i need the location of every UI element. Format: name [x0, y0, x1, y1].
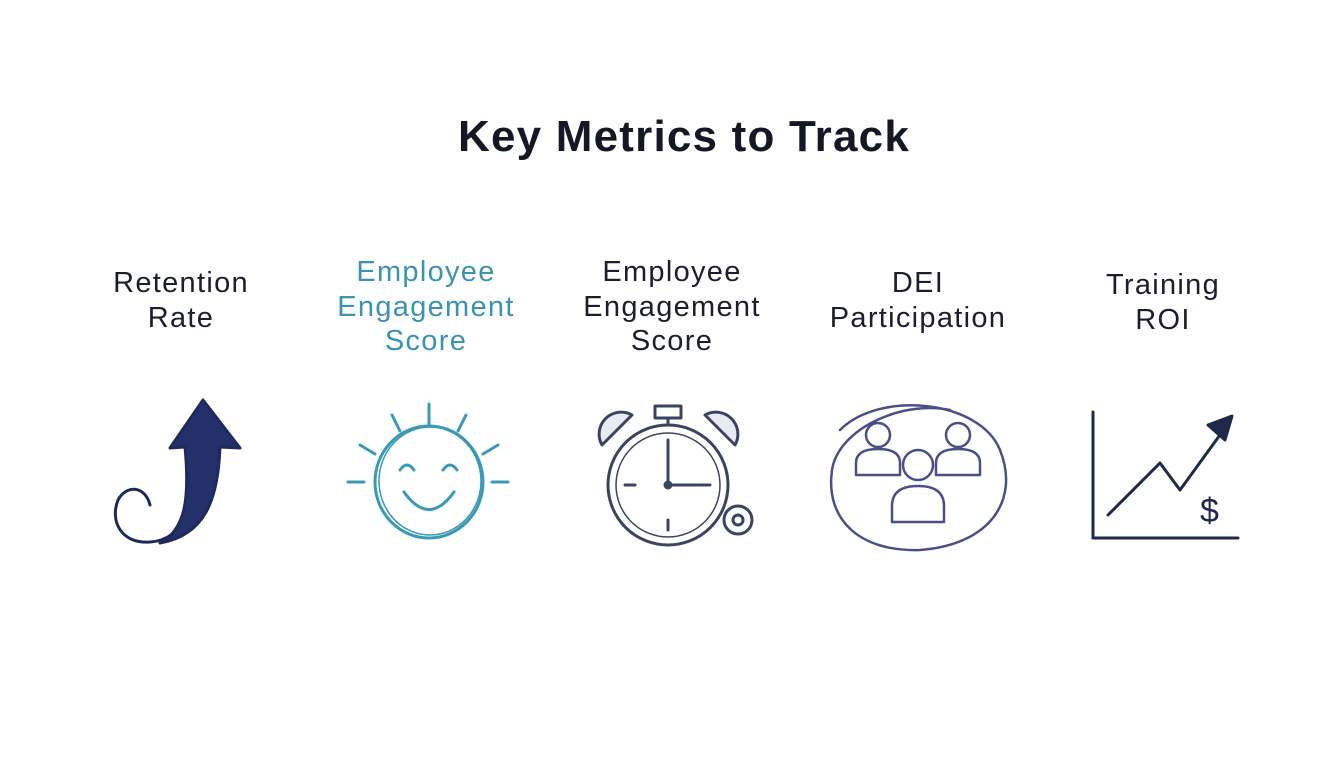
- label: retention rate: Rate: [148, 302, 214, 334]
- label: training ROI: Training: [1106, 269, 1220, 301]
- label: engagement score: Engagement: [583, 290, 761, 322]
- label: DEI participation: [830, 267, 1006, 334]
- icon: smiley sun: [348, 404, 508, 538]
- icon: ROI growth chart: [1093, 412, 1238, 538]
- icon: ROI growth chart: $: [1200, 492, 1219, 530]
- icon: curved arrow: [115, 400, 240, 543]
- label: engagement score: [583, 256, 761, 357]
- label: engagement score: Employee: [602, 256, 742, 288]
- title: Key Metrics to Track: [458, 112, 910, 161]
- label: training ROI: [1106, 269, 1220, 336]
- label: training ROI: ROI: [1135, 304, 1191, 336]
- icon: DEI people group: [831, 405, 1006, 550]
- label: engagement score (teal): Score: [385, 325, 467, 357]
- label: engagement score: Score: [631, 325, 713, 357]
- label: DEI participation: Participation: [830, 302, 1006, 334]
- label: engagement score (teal): [337, 256, 515, 357]
- label: retention rate: Retention: [113, 267, 249, 299]
- label: engagement score (teal): Engagement: [337, 290, 515, 322]
- label: retention rate: [113, 267, 249, 334]
- label: engagement score (teal): Employee: [356, 256, 496, 288]
- icon: stopwatch with gear: [599, 406, 752, 545]
- label: DEI participation: DEI: [892, 267, 944, 299]
